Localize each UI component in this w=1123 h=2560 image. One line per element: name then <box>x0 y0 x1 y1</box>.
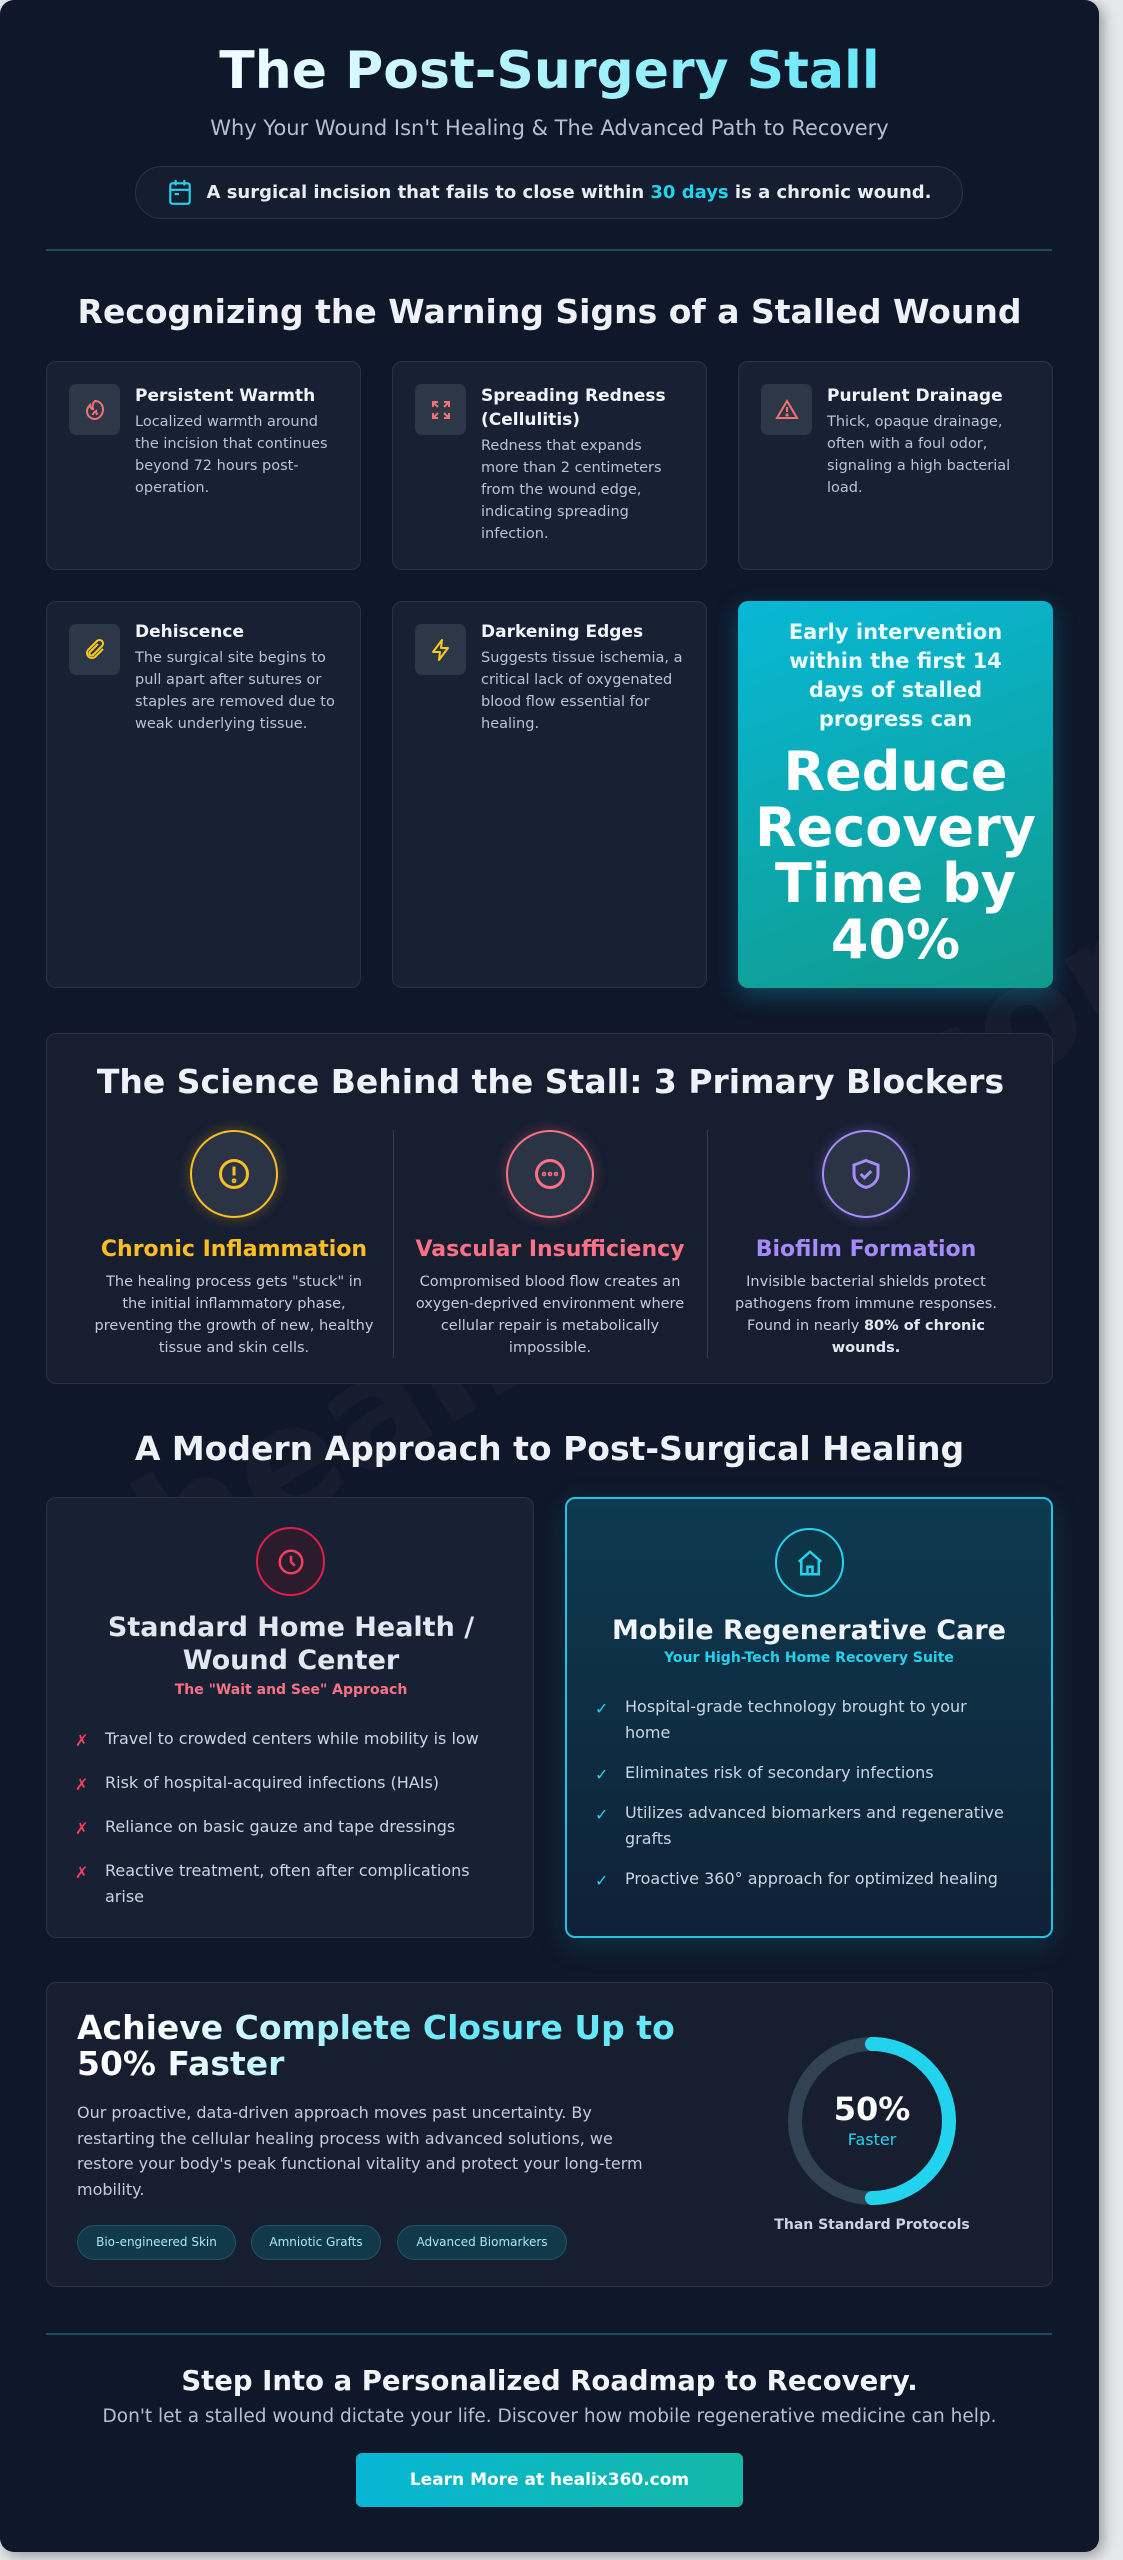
CTA button <box>356 2453 743 2507</box>
tag: amniotic grafts: Amniotic Grafts <box>269 2235 363 2249</box>
card: persistent warmth: beyond 72 hours post- <box>135 458 299 474</box>
card: darkening edges: blood flow essential for <box>481 694 650 710</box>
title: standard: Standard Home Health / <box>108 1612 474 1643</box>
heading: warning signs: Recognizing the Warning Signs of a Stalled Wound <box>78 292 1021 331</box>
blocker: chronic inflammation: preventing the growth of new, healthy <box>95 1318 373 1334</box>
card: dehiscence: staples are removed due to <box>135 694 335 710</box>
card: darkening edges: Suggests tissue ischemia, a <box>481 650 682 666</box>
text: closure paragraph: restarting the cellular healing process with advanced solutions, we <box>77 2129 613 2148</box>
title: standard: Wound Center <box>183 1645 399 1676</box>
subtitle: Why Your Wound Isn't Healing & The Advanced Path to Recovery <box>210 116 889 140</box>
list: mobile benefits: ✓ <box>595 1805 608 1824</box>
list: standard drawbacks: arise <box>105 1887 144 1906</box>
blocker: chronic inflammation: Chronic Inflammation <box>101 1237 367 1262</box>
blocker: vascular insufficiency: impossible. <box>509 1340 591 1356</box>
icon: shield check <box>822 1130 910 1218</box>
list: mobile benefits: ✓ <box>595 1765 608 1784</box>
CTA button: Learn More at healix360.com <box>410 2470 689 2490</box>
stat callout: reduce recovery 40%: Reduce Recovery Time by 40% <box>755 740 1036 971</box>
tag: bio-engineered skin <box>77 2225 236 2260</box>
panel: standard care <box>46 1497 534 1938</box>
list: mobile benefits <box>595 1697 1004 1890</box>
card: spreading redness: (Cellulitis) <box>481 410 580 430</box>
blocker: vascular insufficiency: Vascular Insufficiency <box>415 1237 685 1262</box>
card: dehiscence: The surgical site begins to <box>135 650 326 666</box>
list: mobile benefits: Utilizes advanced biomarkers and regenerative <box>625 1803 1004 1822</box>
chart: 50% ring: Faster <box>848 2130 897 2149</box>
card: spreading redness: Spreading Redness <box>481 386 666 406</box>
list: standard drawbacks: ✗ <box>75 1863 88 1882</box>
card: purulent drainage: Purulent Drainage <box>827 386 1003 406</box>
icon: warning triangle <box>761 384 812 435</box>
callout pill: 30 days: A surgical incision that fails to close within 30 days is a chronic wound. <box>206 182 931 203</box>
list: mobile benefits: grafts <box>625 1829 672 1848</box>
title: standard <box>108 1612 474 1676</box>
panel: mobile regenerative care <box>565 1497 1053 1938</box>
CTA subtext: Don't let a stalled wound dictate your life. Discover how mobile regenerative medicine can help. <box>103 2406 996 2427</box>
card: spreading redness: infection. <box>481 526 549 542</box>
card: purulent drainage: signaling a high bacterial <box>827 458 1010 474</box>
chart: 50% ring <box>788 2037 956 2205</box>
card: darkening edges: Darkening Edges <box>481 622 643 642</box>
blocker: biofilm formation: pathogens from immune responses. <box>735 1296 997 1312</box>
blocker: biofilm formation: Invisible bacterial shields protect <box>746 1274 986 1290</box>
stat callout: reduce recovery 40% <box>738 601 1053 988</box>
panel: standard care: The "Wait and See" Approach <box>175 1682 407 1698</box>
blocker: biofilm formation: Biofilm Formation <box>756 1237 976 1262</box>
blocker: vascular insufficiency: Compromised blood flow creates an <box>420 1274 680 1290</box>
card: persistent warmth: Persistent Warmth <box>135 386 315 406</box>
list: standard drawbacks: Risk of hospital-acquired infections (HAIs) <box>105 1773 439 1792</box>
tag: bio-engineered skin: Bio-engineered Skin <box>96 2235 217 2249</box>
blocker: biofilm formation: wounds. <box>832 1340 900 1356</box>
list: standard drawbacks: Reliance on basic gauze and tape dressings <box>105 1817 455 1836</box>
icon: home <box>775 1528 844 1597</box>
heading: science: The Science Behind the Stall: 3 Primary Blockers <box>97 1062 1004 1101</box>
list: standard drawbacks: ✗ <box>75 1775 88 1794</box>
card: dehiscence: Dehiscence <box>135 622 244 642</box>
card: darkening edges: critical lack of oxygenated <box>481 672 672 688</box>
blocker: biofilm formation: Found in nearly 80% of chronic <box>747 1318 985 1334</box>
blocker: chronic inflammation: The healing process gets "stuck" in <box>106 1274 362 1290</box>
card: spreading redness: indicating spreading <box>481 504 629 520</box>
card: spreading redness: from the wound edge, <box>481 482 642 498</box>
card: dehiscence: weak underlying tissue. <box>135 716 307 732</box>
blocker: chronic inflammation: tissue and skin cells. <box>159 1340 309 1356</box>
text: closure paragraph: mobility. <box>77 2180 144 2199</box>
callout pill: 30 days <box>135 166 963 219</box>
blocker: biofilm formation <box>735 1124 997 1356</box>
text: closure paragraph: restore your body's peak functional vitality and protect your long-term <box>77 2154 643 2173</box>
blocker: vascular insufficiency <box>415 1123 685 1356</box>
list: standard drawbacks <box>75 1729 479 1906</box>
blocker: vascular insufficiency: oxygen-deprived environment where <box>416 1296 684 1312</box>
tag: amniotic grafts <box>251 2225 381 2260</box>
icon: calendar <box>169 180 191 205</box>
heading: achieve closure: Achieve Complete Closure Up to <box>77 2008 675 2047</box>
card: purulent drainage: load. <box>827 480 863 496</box>
list: mobile benefits: ✓ <box>595 1871 608 1890</box>
list: standard drawbacks: Reactive treatment, often after complications <box>105 1861 470 1880</box>
card: dehiscence: pull apart after sutures or <box>135 672 321 688</box>
blocker: chronic inflammation <box>95 1123 373 1356</box>
title: mobile: Mobile Regenerative Care <box>612 1615 1006 1646</box>
card: darkening edges <box>392 601 707 988</box>
icon: dotted circle <box>506 1130 594 1218</box>
tag: advanced biomarkers: Advanced Biomarkers <box>416 2235 548 2249</box>
list: mobile benefits: Proactive 360° approach for optimized healing <box>625 1869 998 1888</box>
list: mobile benefits: home <box>625 1723 670 1742</box>
text: closure paragraph: Our proactive, data-driven approach moves past uncertainty. By <box>77 2103 592 2122</box>
chart: 50% ring: 50% <box>834 2090 910 2128</box>
card: purulent drainage: often with a foul odor, <box>827 436 987 452</box>
list: mobile benefits: ✓ <box>595 1699 608 1718</box>
panel: achieve closure <box>46 1982 1053 2287</box>
card: purulent drainage: Thick, opaque drainage, <box>827 414 1002 430</box>
icon: clock <box>256 1527 325 1596</box>
card: persistent warmth: Localized warmth around <box>135 414 318 430</box>
icon: flame <box>69 384 120 435</box>
blocker: vascular insufficiency: cellular repair is metabolically <box>441 1318 659 1334</box>
title: The Post-Surgery Stall <box>219 41 880 101</box>
icon: alert circle <box>190 1130 278 1218</box>
list: standard drawbacks: Travel to crowded centers while mobility is low <box>105 1729 479 1748</box>
icon: lightning <box>415 624 466 675</box>
card: spreading redness <box>392 361 707 570</box>
label: than standard protocols: Than Standard Protocols <box>774 2217 970 2233</box>
icon: expand arrows <box>415 384 466 435</box>
text: closure paragraph <box>77 2103 643 2199</box>
heading: achieve closure: 50% Faster <box>77 2044 284 2083</box>
card: spreading redness: more than 2 centimeters <box>481 460 662 476</box>
title <box>0 38 1099 104</box>
panel: mobile regenerative care: Your High-Tech Home Recovery Suite <box>664 1650 954 1666</box>
blocker: chronic inflammation: the initial inflammatory phase, <box>122 1296 346 1312</box>
list: standard drawbacks: ✗ <box>75 1731 88 1750</box>
stat callout: reduce recovery 40%: Early intervention within the first 14 days of stalled progress can <box>789 620 1002 731</box>
list: standard drawbacks: ✗ <box>75 1819 88 1838</box>
card: darkening edges: healing. <box>481 716 539 732</box>
icon: paperclip <box>69 624 120 675</box>
heading: modern approach: A Modern Approach to Post-Surgical Healing <box>135 1429 964 1468</box>
card: dehiscence <box>46 601 361 988</box>
card: purulent drainage <box>738 361 1053 570</box>
heading: achieve closure <box>77 2010 717 2082</box>
tag: advanced biomarkers <box>397 2225 567 2260</box>
card: persistent warmth: operation. <box>135 480 209 496</box>
list: mobile benefits: Eliminates risk of secondary infections <box>625 1763 934 1782</box>
card: spreading redness: Redness that expands <box>481 438 642 454</box>
card: persistent warmth <box>46 361 361 570</box>
panel: 3 primary blockers <box>46 1033 1053 1384</box>
card: persistent warmth: the incision that continues <box>135 436 328 452</box>
list: mobile benefits: Hospital-grade technology brought to your <box>625 1697 967 1716</box>
CTA heading: Step Into a Personalized Roadmap to Recovery. <box>181 2365 918 2397</box>
